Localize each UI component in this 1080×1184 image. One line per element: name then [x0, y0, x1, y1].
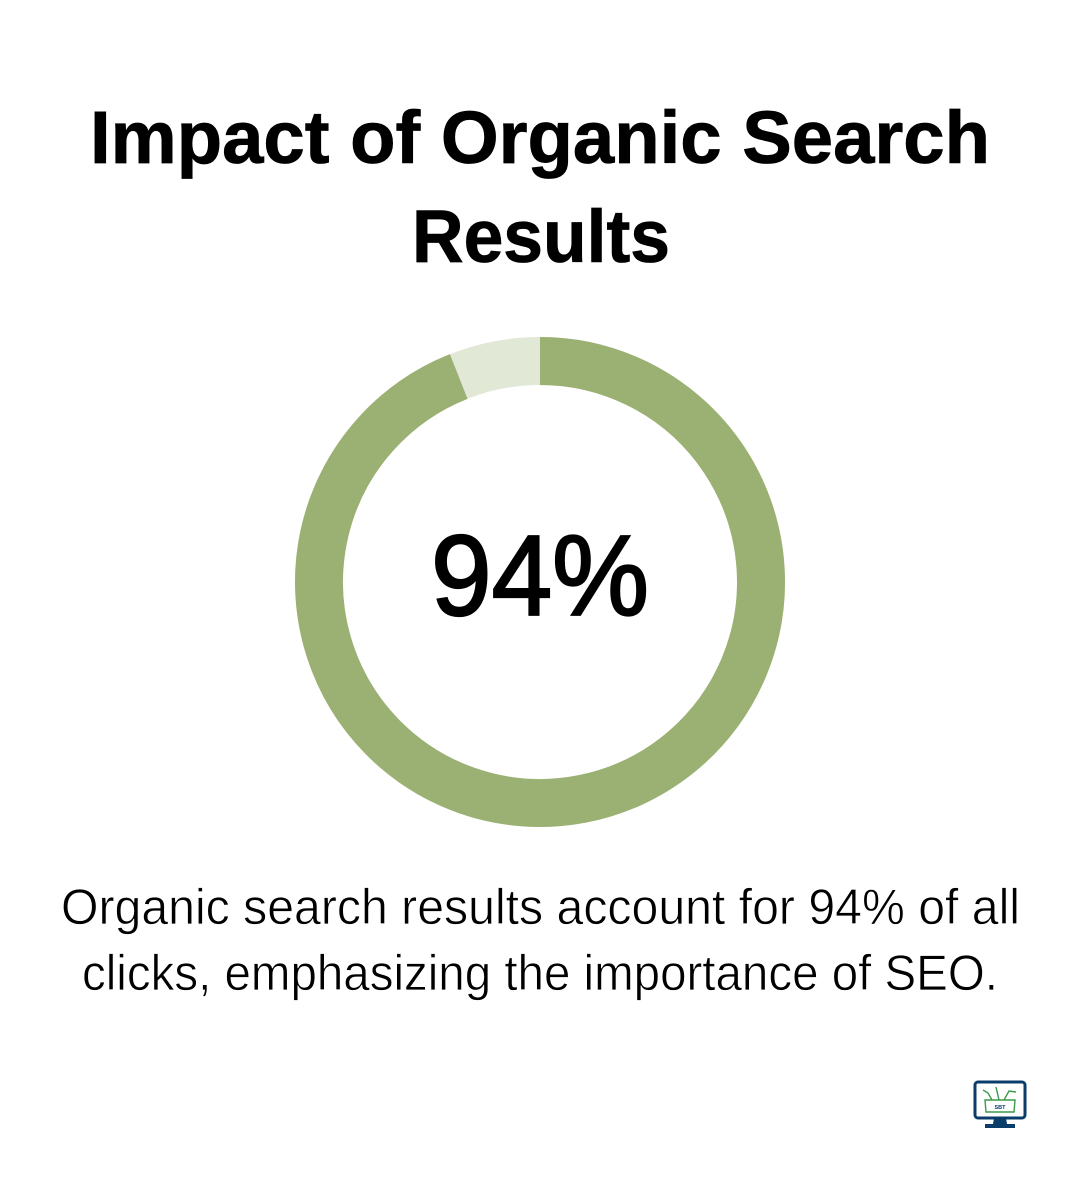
toolbox	[983, 1087, 1016, 1112]
description text: clicks, emphasizing the importance of SEO.	[82, 945, 998, 1001]
icon: SBT monitor logo with toolbox	[975, 1082, 1025, 1128]
donut chart: 94%	[319, 361, 761, 803]
title	[90, 96, 990, 278]
title: Impact of Organic Search	[90, 96, 990, 179]
logo text: SBT	[994, 1105, 1006, 1111]
monitor screen	[975, 1082, 1025, 1118]
center value: 94%	[431, 513, 649, 640]
ring background: remaining 6%	[319, 361, 761, 803]
title: Results	[412, 195, 670, 278]
description text	[61, 879, 1020, 1001]
ring value: 94%	[319, 361, 761, 803]
description text: Organic search results account for 94% of all	[61, 879, 1020, 935]
monitor stand	[985, 1118, 1015, 1128]
